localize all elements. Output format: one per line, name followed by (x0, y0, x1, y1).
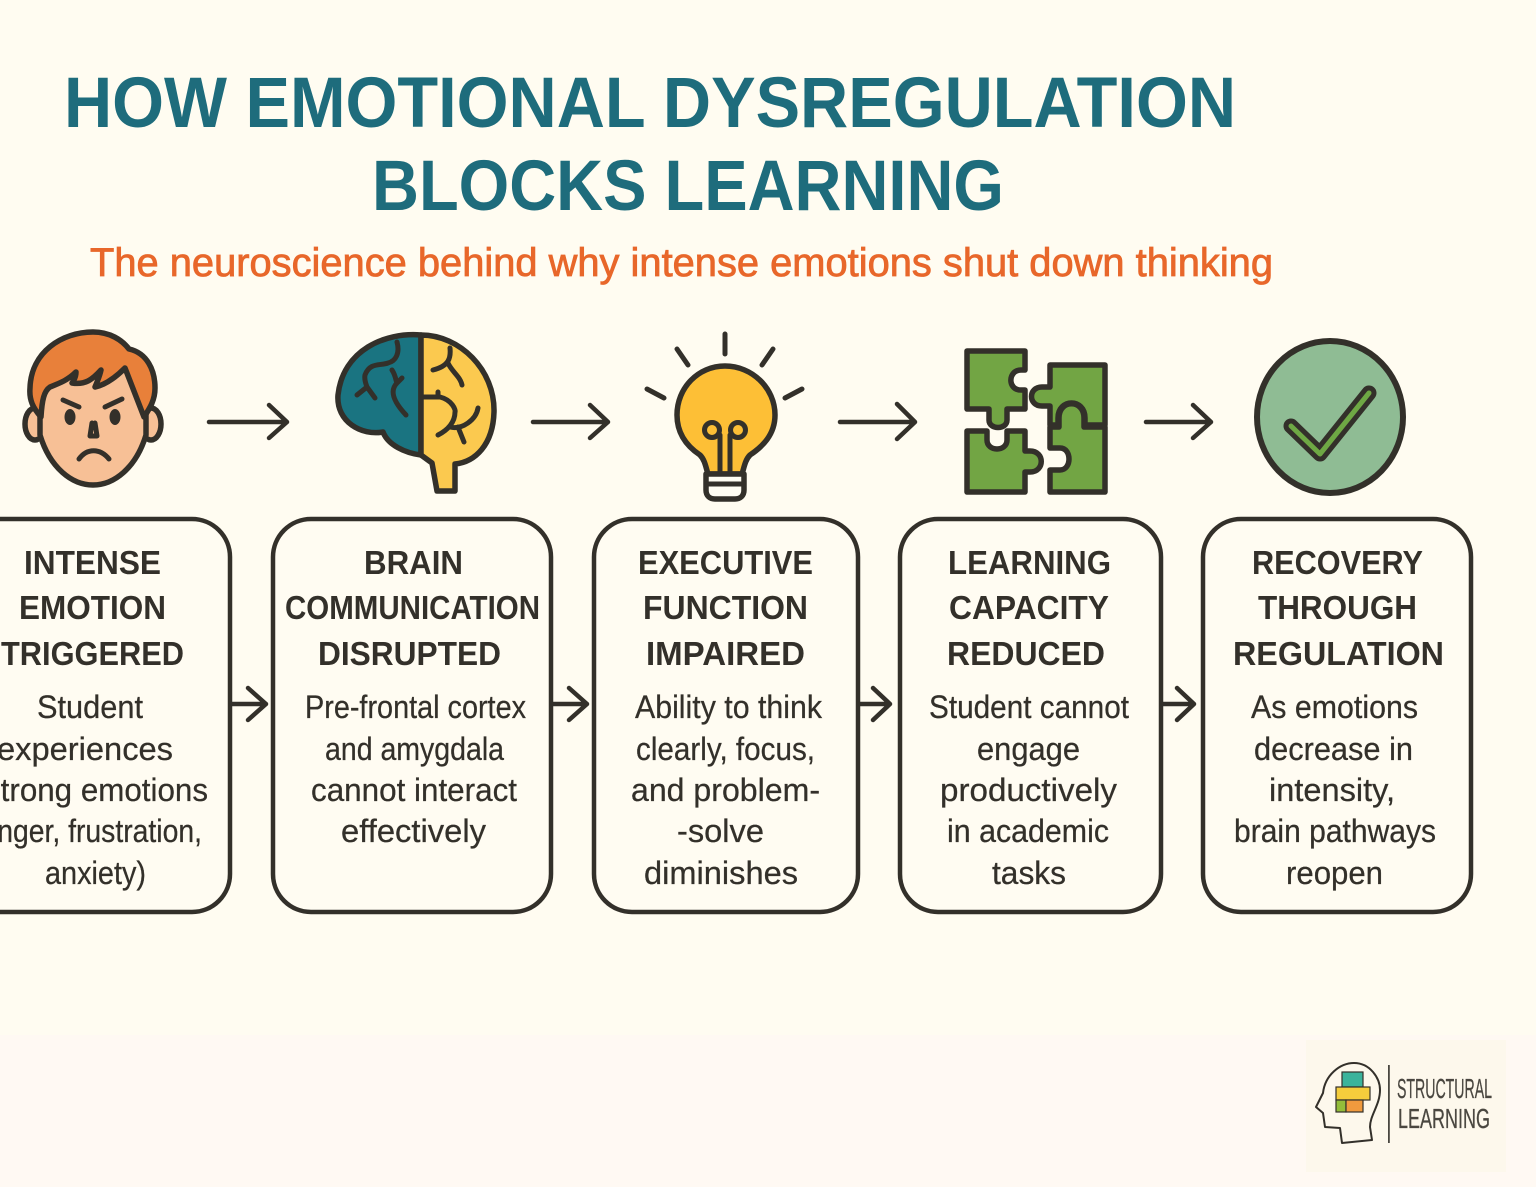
panel: executive function impaired: IMPAIRED (646, 635, 805, 672)
panel: intense emotion triggered: experiences (0, 731, 173, 767)
title: HOW EMOTIONAL DYSREGULATION (64, 64, 1236, 143)
arrow (1163, 688, 1194, 720)
panel: brain communication disrupted: and amygdala (325, 731, 504, 767)
panel: brain communication disrupted: Pre-frontal cortex (305, 689, 526, 725)
panel: intense emotion triggered: TRIGGERED (1, 635, 184, 672)
panel: brain communication disrupted: DISRUPTED (318, 635, 501, 672)
panel: recovery through regulation: REGULATION (1233, 635, 1444, 672)
icon: light bulb (647, 334, 802, 499)
icon: check mark (1257, 341, 1403, 493)
panel: learning capacity reduced: Student cannot (929, 689, 1129, 725)
arrow (209, 405, 287, 438)
arrow (553, 688, 587, 720)
title (64, 64, 1236, 226)
panel: brain communication disrupted: cannot interact (311, 772, 517, 808)
arrow (232, 688, 266, 720)
panel: intense emotion triggered: EMOTION (19, 589, 166, 626)
panel: intense emotion triggered: anxiety) (45, 855, 146, 891)
panel: learning capacity reduced (900, 519, 1161, 912)
panel: brain communication disrupted: BRAIN (364, 544, 463, 581)
panel: learning capacity reduced: CAPACITY (949, 589, 1109, 626)
icon: angry face (25, 332, 161, 485)
panel: learning capacity reduced: productively (940, 772, 1117, 808)
panel: recovery through regulation: As emotions (1251, 689, 1418, 725)
panel: intense emotion triggered: INTENSE (24, 544, 161, 581)
panel: intense emotion triggered: Student (37, 689, 143, 725)
panel: learning capacity reduced: LEARNING (948, 544, 1111, 581)
logo: structural learning (1306, 1040, 1506, 1172)
panel: executive function impaired: Ability to think (635, 689, 823, 725)
panel: executive function impaired: EXECUTIVE (638, 544, 813, 581)
panel: executive function impaired (594, 519, 858, 912)
panel: recovery through regulation (1203, 519, 1471, 912)
panel: executive function impaired: and problem- (631, 772, 820, 808)
panel: recovery through regulation: decrease in (1254, 731, 1413, 767)
panel: executive function impaired: diminishes (644, 855, 798, 891)
title: BLOCKS LEARNING (372, 147, 1004, 226)
panel: recovery through regulation: brain pathways (1234, 813, 1436, 849)
panel: executive function impaired: -solve (677, 813, 764, 849)
arrow (533, 405, 608, 438)
panel: recovery through regulation: intensity, (1269, 772, 1395, 808)
panel: recovery through regulation: RECOVERY (1252, 544, 1423, 581)
panel: brain communication disrupted: COMMUNICATION (285, 589, 540, 626)
panel: brain communication disrupted: effectively (341, 813, 486, 849)
panel: brain communication disrupted (273, 519, 551, 912)
panel: executive function impaired: FUNCTION (643, 589, 808, 626)
panel: learning capacity reduced: engage (977, 731, 1080, 767)
panel: intense emotion triggered (0, 519, 230, 912)
panel: recovery through regulation: THROUGH (1258, 589, 1417, 626)
panel: recovery through regulation: reopen (1286, 855, 1383, 891)
subtitle: The neuroscience behind why intense emotions shut down thinking (90, 241, 1273, 285)
icon: brain (338, 335, 494, 491)
icon: puzzle pieces (967, 351, 1105, 492)
arrow (1146, 405, 1211, 438)
panel: learning capacity reduced: tasks (992, 855, 1066, 891)
arrow (860, 688, 890, 720)
panel: executive function impaired: clearly, focus, (636, 731, 815, 767)
panel: learning capacity reduced: REDUCED (947, 635, 1105, 672)
arrow (840, 404, 915, 439)
panel: learning capacity reduced: in academic (947, 813, 1109, 849)
